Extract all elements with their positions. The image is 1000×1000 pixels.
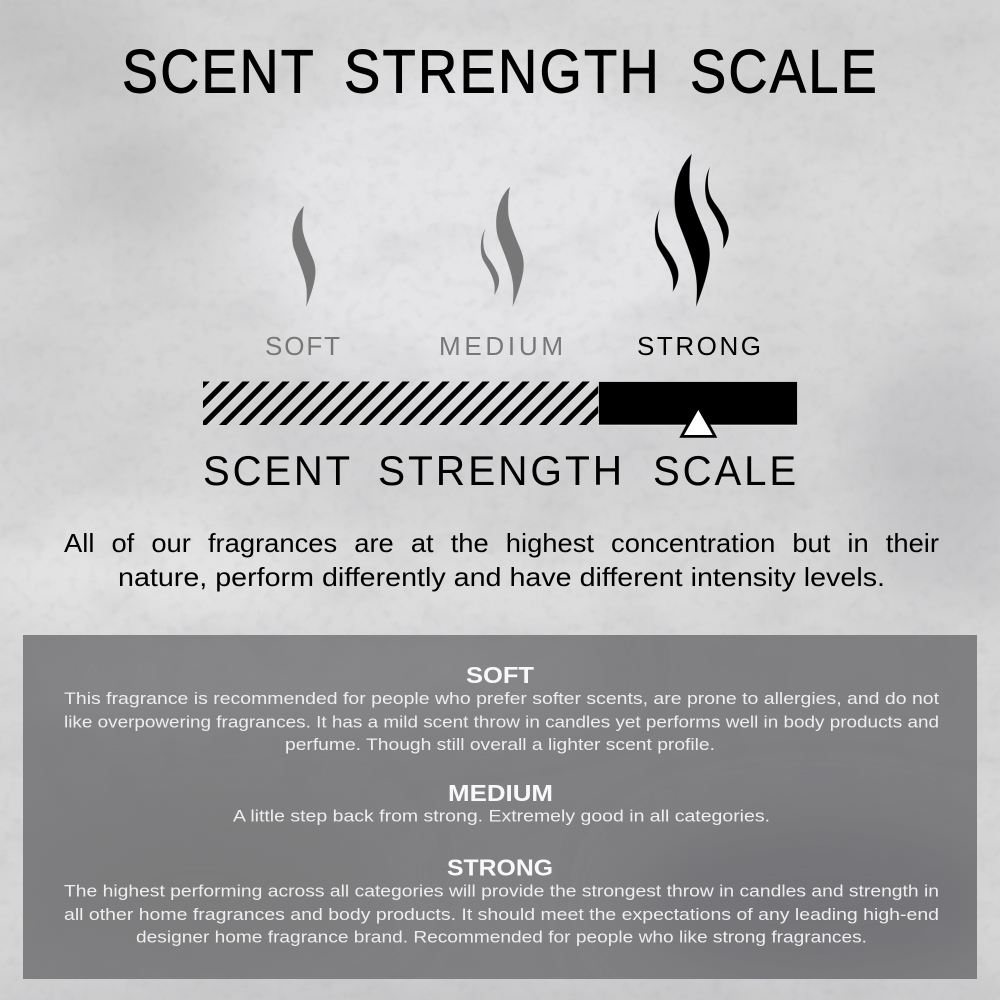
soft description: like overpowering fragrances. It has a mild scent throw in candles yet performs well in body products and xyxy=(64,712,939,732)
strong description: The highest performing across all categories will provide the strongest throw in candles and strength in xyxy=(64,882,939,900)
icon: medium scent waves xyxy=(481,187,524,307)
main title xyxy=(122,38,879,106)
scale marker triangle xyxy=(679,410,717,438)
label: soft: SOFT xyxy=(265,331,340,361)
intro text xyxy=(64,528,939,592)
medium description: A little step back from strong. Extremely good in all categories. xyxy=(233,806,770,826)
soft section xyxy=(64,662,939,754)
icon: soft scent wave xyxy=(292,206,315,307)
strong description: designer home fragrance brand. Recommended for people who like strong fragrances. xyxy=(136,928,867,946)
soft description xyxy=(64,689,939,754)
scale bar xyxy=(203,382,798,438)
strong section xyxy=(64,854,939,946)
strong heading: STRONG xyxy=(447,854,553,880)
label: strong: STRONG xyxy=(637,331,761,361)
main title: STRENGTH xyxy=(344,38,661,106)
solid bar segment xyxy=(598,382,798,425)
hatched bar segment xyxy=(203,382,599,425)
main title: SCALE xyxy=(690,38,879,106)
soft heading: SOFT xyxy=(466,662,534,688)
label: medium: MEDIUM xyxy=(439,331,563,361)
medium section xyxy=(233,780,770,826)
intro text: All of our fragrances are at the highest concentration but in their xyxy=(64,528,939,558)
intro text: nature, perform differently and have different intensity levels. xyxy=(118,562,885,592)
strong description xyxy=(64,882,939,946)
soft description: This fragrance is recommended for people who prefer softer scents, are prone to allergies, and do not xyxy=(64,689,939,708)
medium heading: MEDIUM xyxy=(448,780,553,806)
strong description: all other home fragrances and body products. It should meet the expectations of any leading high-end xyxy=(64,905,939,924)
scale caption xyxy=(203,447,799,494)
scale caption: STRENGTH xyxy=(378,447,625,494)
scale caption: SCENT xyxy=(203,447,353,494)
icon: strong scent waves xyxy=(655,153,729,308)
main title: SCENT xyxy=(122,38,316,106)
soft description: perfume. Though still overall a lighter scent profile. xyxy=(285,735,715,754)
panel: descriptions xyxy=(0,630,1000,980)
scale caption: SCALE xyxy=(653,447,799,494)
